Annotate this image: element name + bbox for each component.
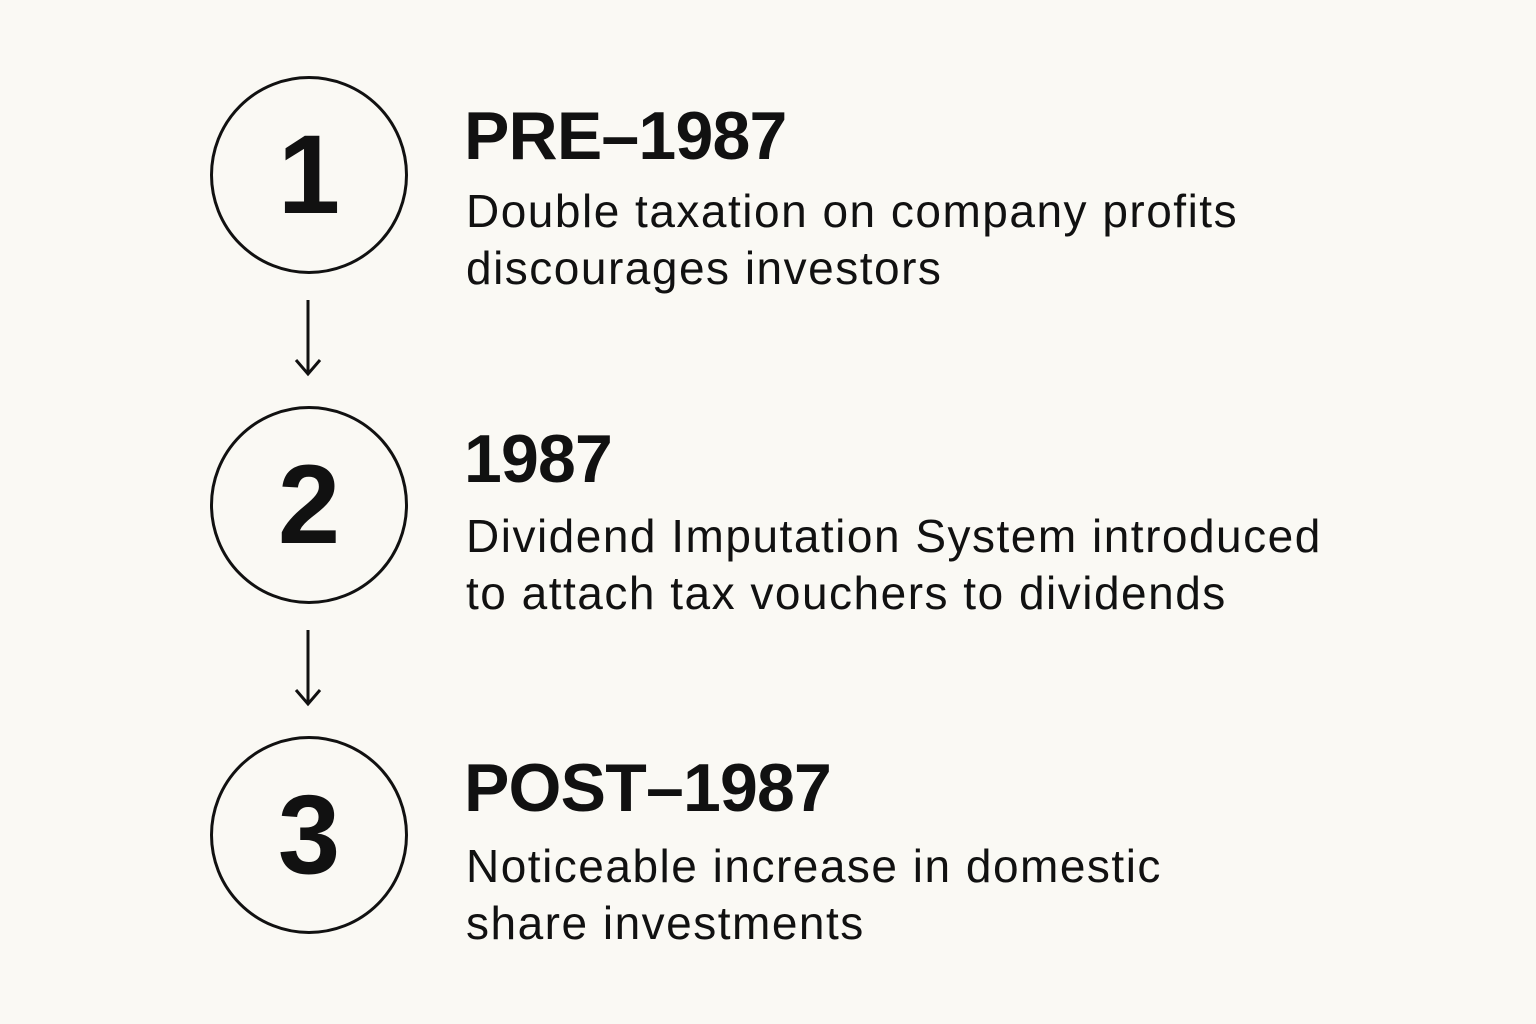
arrow 2 xyxy=(294,630,322,706)
step 2 text xyxy=(466,510,1322,619)
step 3 heading: POST–1987 xyxy=(464,750,831,826)
step 2 heading: 1987 xyxy=(464,421,612,497)
step 1 text xyxy=(466,185,1238,294)
step 2 text: Dividend Imputation System introduced xyxy=(466,510,1322,562)
step 2 circle xyxy=(210,406,408,604)
arrow 1 xyxy=(294,300,322,376)
step 3 circle: 3 xyxy=(278,772,340,897)
step 3 text: Noticeable increase in domestic xyxy=(466,840,1162,892)
step 1 text: Double taxation on company profits xyxy=(466,185,1238,237)
step 2 text: to attach tax vouchers to dividends xyxy=(466,567,1227,619)
step 1 circle xyxy=(210,76,408,274)
step 3 text: share investments xyxy=(466,897,865,949)
step 1 heading: PRE–1987 xyxy=(464,98,787,174)
step 1 circle: 1 xyxy=(278,112,340,237)
step 3 circle xyxy=(210,736,408,934)
step 2 circle: 2 xyxy=(278,442,340,567)
step 3 text xyxy=(466,840,1162,949)
step 1 text: discourages investors xyxy=(466,242,942,294)
